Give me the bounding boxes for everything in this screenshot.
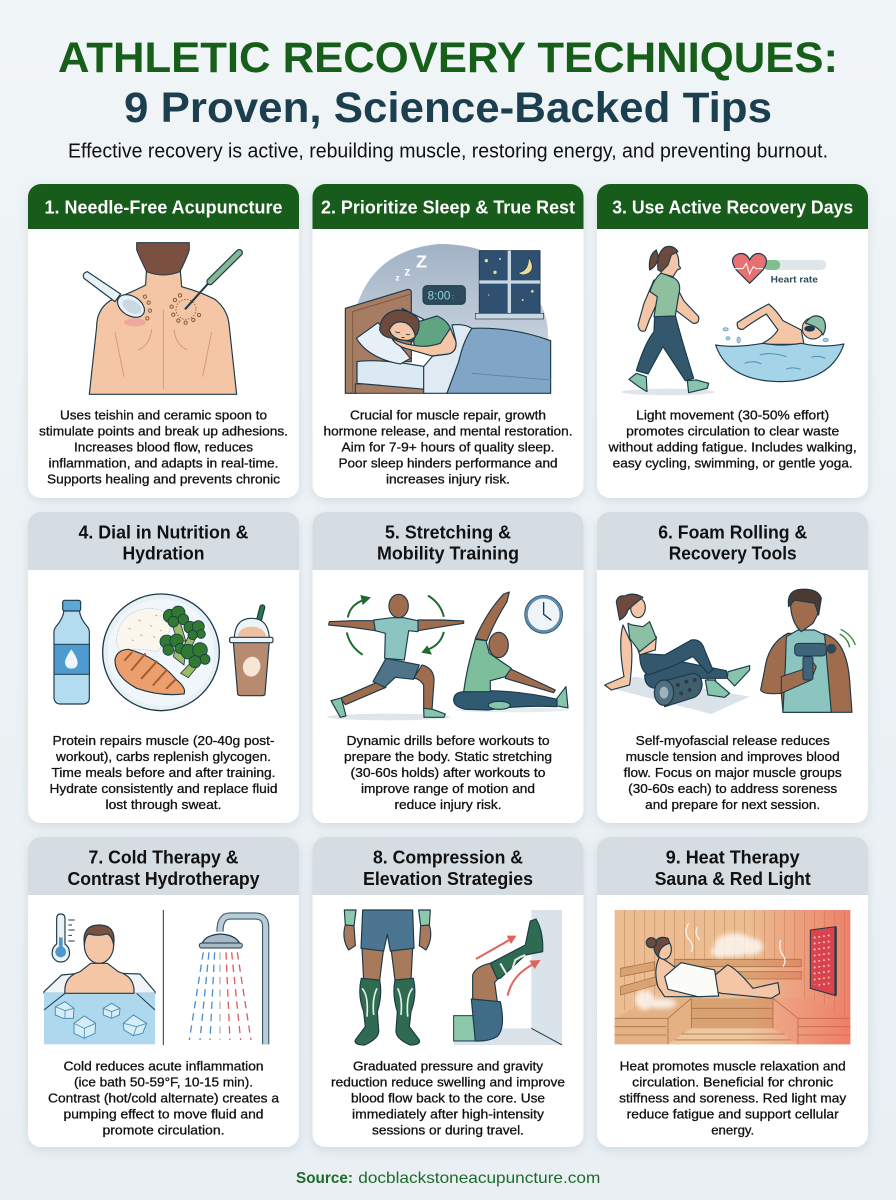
- heading: card 1: [28, 184, 299, 229]
- body text: card 1: inflammation, and adapts in real-time.: [48, 456, 278, 470]
- body text: card 1: Uses teishin and ceramic spoon to: [60, 408, 267, 422]
- body text: card 1: Supports healing and prevents chronic: [47, 472, 280, 486]
- body text: card 8: sessions or during travel.: [372, 1122, 524, 1137]
- heading: card 5: 5. Stretching &: [385, 522, 511, 542]
- body text: card 9: Heat promotes muscle relaxation and: [620, 1058, 846, 1073]
- body text: card 2: [324, 408, 572, 486]
- source footer: Source:: [296, 1170, 353, 1187]
- icon: sleeping person in bed: 8:00: [428, 289, 451, 303]
- icon: ice bath and contrast shower: [44, 910, 266, 1045]
- body text: card 9: reduce fatigue and support cellular: [627, 1106, 839, 1121]
- body text: card 7: (ice bath 50-59°F, 10-15 min).: [74, 1074, 253, 1089]
- body text: card 3: [608, 408, 857, 470]
- icon: sleeping person in bed: ::: [451, 295, 455, 301]
- body text: card 7: promote circulation.: [102, 1122, 224, 1137]
- heading: card 4: Hydration: [122, 543, 204, 564]
- body text: card 6: muscle tension and improves blood: [626, 749, 840, 764]
- heading: card 5: [312, 512, 584, 570]
- body text: card 8: Graduated pressure and gravity: [353, 1058, 543, 1073]
- body text: card 5: prepare the body. Static stretching: [344, 749, 552, 764]
- body text: card 4: Hydrate consistently and replace fluid: [50, 781, 278, 796]
- body text: card 7: [48, 1058, 280, 1137]
- title: [58, 34, 838, 132]
- panel: 1. Needle-Free Acupuncture: [28, 184, 299, 498]
- body text: card 2: hormone release, and mental restoration.: [324, 424, 572, 438]
- icon: water bottle, plate and shake: [54, 594, 273, 711]
- body text: card 1: [39, 408, 288, 486]
- body text: card 1: stimulate points and break up adhesions.: [39, 424, 288, 438]
- body text: card 9: stiffness and soreness. Red light may: [619, 1090, 847, 1105]
- heading: card 9: Sauna & Red Light: [655, 868, 811, 889]
- heading: card 2: [312, 184, 584, 229]
- body text: card 5: Dynamic drills before workouts to: [346, 733, 550, 748]
- body text: card 7: pumping effect to move fluid and: [64, 1106, 264, 1121]
- body text: card 2: Poor sleep hinders performance and: [338, 456, 558, 470]
- icon: lunge and seated stretch: [327, 592, 569, 720]
- heading: card 6: Recovery Tools: [669, 543, 797, 564]
- body text: card 9: energy.: [711, 1122, 754, 1137]
- panel: 6. Foam Rolling & Recovery Tools: [597, 512, 868, 823]
- body text: card 9: [619, 1058, 847, 1137]
- body text: card 3: promotes circulation to clear waste: [626, 424, 839, 438]
- body text: card 8: [331, 1058, 565, 1137]
- icon: compression socks and leg elevation: [344, 910, 562, 1045]
- body text: card 3: easy cycling, swimming, or gentle yoga.: [613, 456, 853, 470]
- heading: card 1: 1. Needle-Free Acupuncture: [44, 196, 282, 218]
- heading: card 8: 8. Compression &: [373, 847, 523, 868]
- body text: card 5: (30-60s holds) after workouts to: [350, 765, 546, 780]
- icon: sleeping person in bed: [345, 244, 551, 393]
- heading: card 7: [28, 837, 299, 895]
- body text: card 6: flow. Focus on major muscle groups: [624, 765, 842, 780]
- panel: 8. Compression & Elevation Strategies: [312, 837, 584, 1147]
- heading: card 6: [597, 512, 868, 570]
- body text: card 4: lost through sweat.: [106, 797, 222, 812]
- body text: card 5: reduce injury risk.: [394, 797, 502, 812]
- icon: sauna with red light panel: [615, 910, 850, 1044]
- body text: card 6: Self-myofascial release reduces: [636, 733, 830, 748]
- body text: card 9: circulation. Beneficial for chronic: [632, 1074, 834, 1089]
- heading: card 4: [28, 512, 299, 570]
- icon: sleeping person in bed: Z: [416, 251, 427, 271]
- heading: card 8: Elevation Strategies: [363, 868, 533, 889]
- icon: foam roller and massage gun: [605, 589, 855, 714]
- body text: card 4: workout), carbs replenish glycogen.: [55, 749, 271, 764]
- heading: card 2: 2. Prioritize Sleep & True Rest: [321, 196, 575, 218]
- heading: card 9: 9. Heat Therapy: [666, 847, 800, 868]
- body text: card 6: [624, 733, 842, 812]
- source footer: docblackstoneacupuncture.com: [358, 1170, 600, 1187]
- heading: card 8: [312, 837, 584, 895]
- body text: card 4: Protein repairs muscle (20-40g post-: [52, 733, 274, 748]
- panel: 7. Cold Therapy & Contrast Hydrotherapy: [28, 837, 299, 1147]
- body text: card 5: [344, 733, 552, 812]
- body text: card 8: immediately after high-intensity: [352, 1106, 544, 1121]
- icon: sleeping person in bed: z: [404, 264, 410, 278]
- heading: card 4: 4. Dial in Nutrition &: [78, 522, 248, 542]
- icon: walker, heart rate and swimmer: Heart rate: [771, 275, 818, 285]
- title: 9 Proven, Science-Backed Tips: [124, 84, 772, 132]
- body text: card 6: (30-60s each) to address soreness: [628, 781, 838, 796]
- body text: card 2: Aim for 7-9+ hours of quality sleep.: [342, 440, 554, 454]
- heading: card 6: 6. Foam Rolling &: [658, 522, 807, 542]
- body text: card 8: reduction reduce swelling and improve: [331, 1074, 565, 1089]
- body text: card 1: Increases blood flow, reduces: [74, 440, 253, 454]
- heading: card 9: [597, 837, 868, 895]
- body text: card 5: improve range of motion and: [361, 781, 535, 796]
- body text: card 2: Crucial for muscle repair, growth: [350, 408, 546, 422]
- panel: 5. Stretching & Mobility Training: [312, 512, 584, 823]
- heading: card 7: 7. Cold Therapy &: [88, 847, 238, 868]
- heading: card 3: [597, 184, 868, 229]
- body text: card 8: blood flow back to the core. Use: [351, 1090, 545, 1105]
- body text: card 7: Cold reduces acute inflammation: [64, 1058, 264, 1073]
- body text: card 7: Contrast (hot/cold alternate) creates a: [48, 1090, 280, 1105]
- body text: card 6: and prepare for next session.: [645, 797, 820, 812]
- icon: back with spoon and teishin: [83, 243, 239, 394]
- body text: card 3: without adding fatigue. Includes walking,: [608, 440, 857, 454]
- panel: 3. Use Active Recovery Days: [597, 184, 868, 498]
- icon: sleeping person in bed: z: [395, 272, 400, 282]
- heading: card 3: 3. Use Active Recovery Days: [612, 196, 853, 218]
- body text: card 4: Time meals before and after training.: [52, 765, 276, 780]
- panel: 4. Dial in Nutrition & Hydration: [28, 512, 299, 823]
- body text: card 2: increases injury risk.: [386, 472, 510, 486]
- body text: card 4: [50, 733, 278, 812]
- panel: 2. Prioritize Sleep & True Rest: [312, 184, 584, 498]
- subtitle: Effective recovery is active, rebuilding muscle, restoring energy, and preventing burnout.: [68, 140, 828, 162]
- heading: card 7: Contrast Hydrotherapy: [68, 868, 260, 889]
- title: ATHLETIC RECOVERY TECHNIQUES:: [58, 34, 838, 82]
- icon: walker, heart rate and swimmer: [621, 246, 844, 395]
- heading: card 5: Mobility Training: [377, 543, 519, 564]
- body text: card 3: Light movement (30-50% effort): [636, 408, 829, 422]
- panel: 9. Heat Therapy Sauna & Red Light: [597, 837, 868, 1147]
